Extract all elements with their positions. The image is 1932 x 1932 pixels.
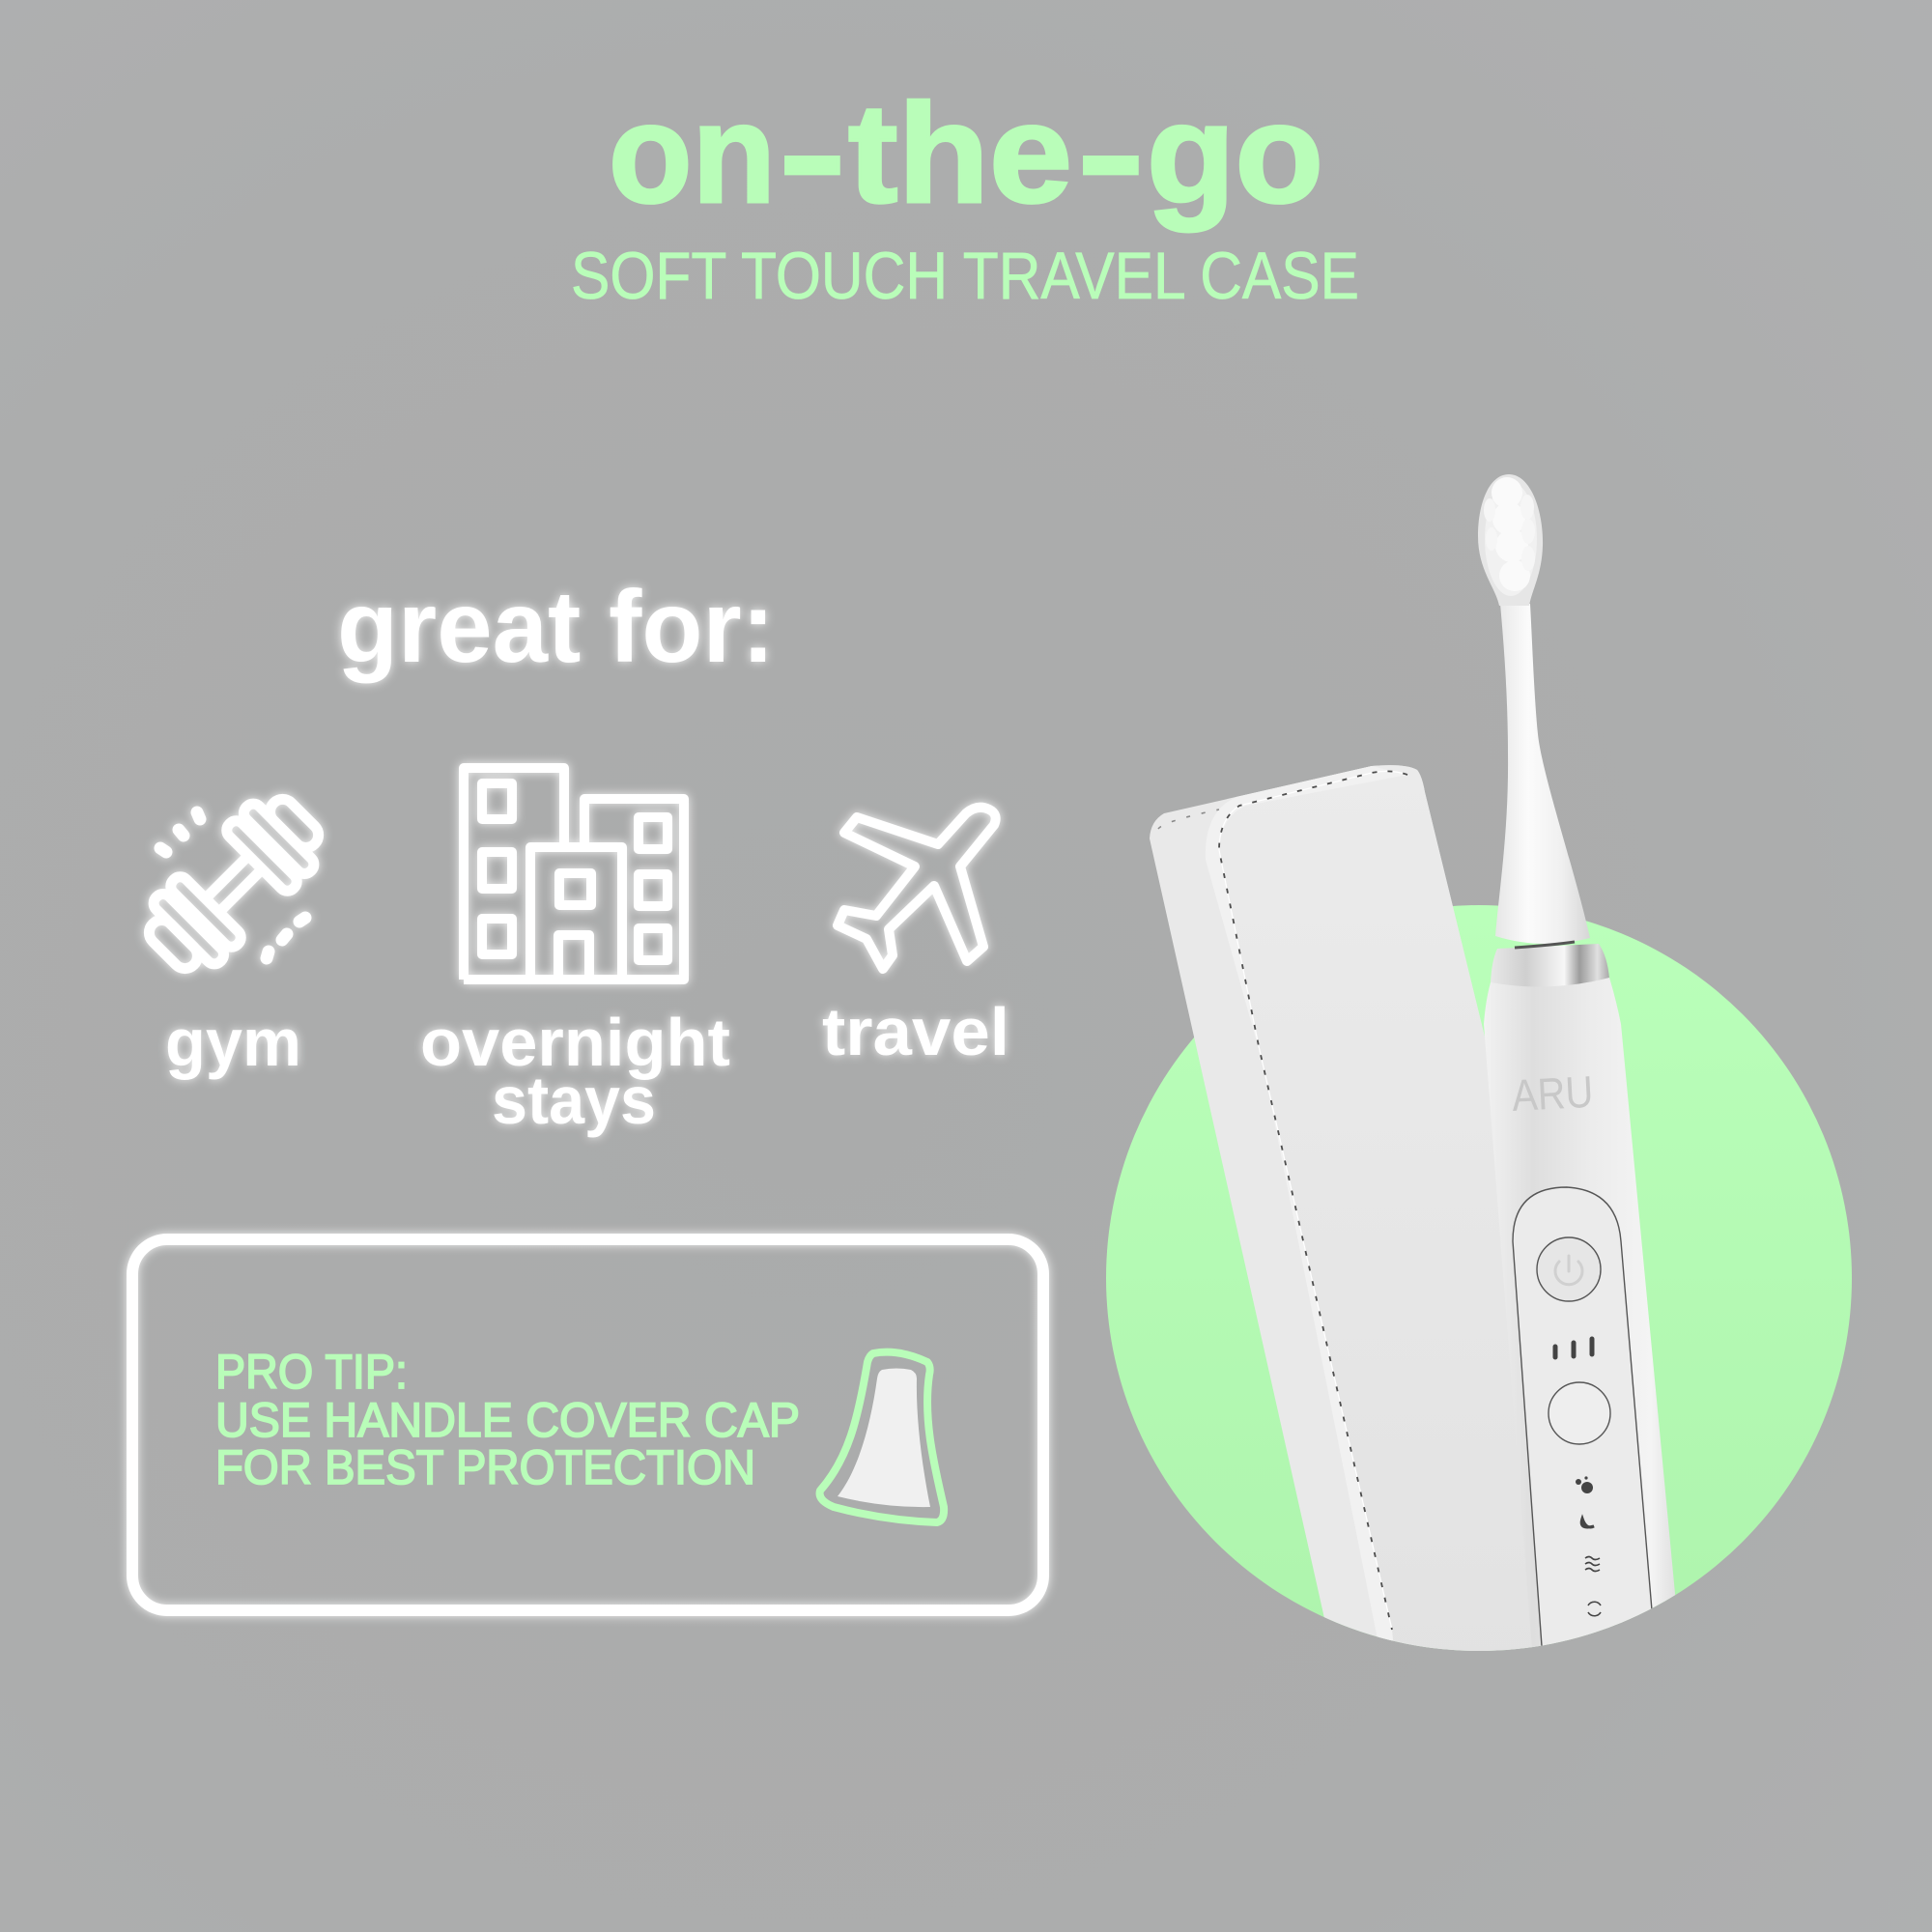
flap edge band xyxy=(1238,766,1393,1640)
flap stitching xyxy=(1219,771,1407,1630)
panel outline xyxy=(132,1239,1043,1610)
case back body xyxy=(1150,765,1546,1700)
panel: pro tip box xyxy=(132,1239,1043,1610)
bristles xyxy=(1484,477,1537,596)
pro tip text xyxy=(215,1345,800,1494)
brush head xyxy=(1478,474,1543,606)
label: travel: travel xyxy=(822,994,1009,1069)
pro tip text: FOR BEST PROTECTION xyxy=(215,1440,755,1494)
travel case xyxy=(1150,765,1546,1700)
ARU logo: ARU xyxy=(1511,1066,1594,1121)
mode bars xyxy=(1555,1339,1592,1357)
case front flap xyxy=(1318,765,1532,1651)
brush neck xyxy=(1495,604,1590,944)
heading: great for: great for: xyxy=(337,570,775,684)
label: overnight stays xyxy=(420,1005,730,1138)
title: go xyxy=(1147,74,1323,232)
control panel xyxy=(1512,1186,1652,1646)
icon: city buildings xyxy=(464,768,684,980)
pro tip text: USE HANDLE COVER CAP xyxy=(215,1393,800,1447)
mode icons xyxy=(1576,1476,1601,1616)
dark collar xyxy=(1515,942,1575,948)
icon: dumbbell xyxy=(132,782,335,985)
title: - xyxy=(779,74,846,232)
icon: handle cover cap xyxy=(820,1352,944,1522)
metal ring xyxy=(1491,944,1609,987)
toothbrush xyxy=(1478,474,1681,1700)
power button xyxy=(1537,1237,1601,1301)
label: overnight stays: stays xyxy=(492,1063,656,1138)
green circle xyxy=(1106,905,1852,1651)
label: overnight stays: overnight xyxy=(420,1005,730,1080)
title: the xyxy=(848,74,1072,232)
icon: airplane xyxy=(838,808,996,969)
mode button xyxy=(1548,1382,1610,1444)
subtitle: SOFT TOUCH TRAVEL CASE xyxy=(571,239,1359,313)
label: gym: gym xyxy=(165,1005,301,1080)
title: on xyxy=(609,74,776,232)
title: - xyxy=(1077,74,1145,232)
product: travel case and toothbrush xyxy=(1150,474,1681,1700)
handle body xyxy=(1484,978,1675,1645)
pro tip text: PRO TIP: xyxy=(215,1345,408,1399)
title xyxy=(609,74,1323,232)
